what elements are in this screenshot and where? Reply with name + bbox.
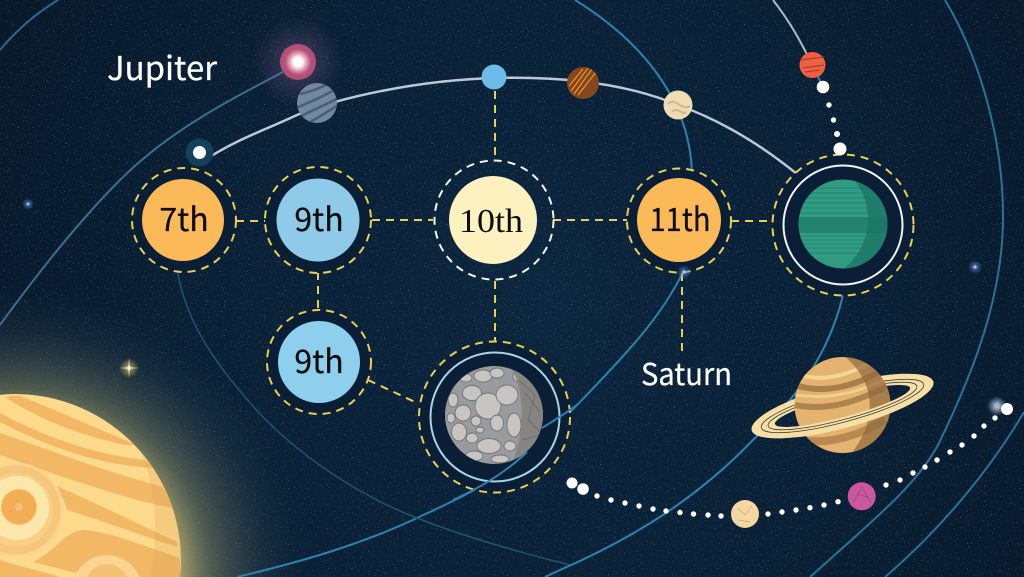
striped blue planet	[297, 83, 337, 123]
small cream planet	[731, 500, 759, 528]
node: 11th: 11th	[650, 195, 710, 241]
label: Jupiter: Jupiter	[107, 42, 217, 90]
ringed planet	[746, 355, 939, 455]
node: 7th	[132, 168, 236, 272]
dashed connectors	[236, 91, 773, 402]
pink glowing star	[253, 17, 343, 107]
node: 10th	[434, 160, 554, 280]
light blue planet	[482, 64, 506, 90]
node: 11th	[627, 168, 731, 272]
cream planet	[664, 90, 692, 120]
node: green planet	[772, 154, 914, 296]
node: rocky planet	[419, 342, 578, 500]
node: 9th upper	[265, 167, 371, 273]
sun glow	[0, 285, 315, 577]
red planet	[800, 52, 826, 78]
dotted trail: top	[817, 81, 846, 156]
node: 10th: 10th	[459, 203, 523, 240]
sun	[0, 394, 190, 577]
node: 9th upper: 9th	[294, 195, 344, 241]
distant blue sparkles	[22, 198, 982, 279]
white node at orbit start	[186, 138, 214, 166]
main silver orbit	[205, 78, 797, 174]
pink planet	[848, 482, 876, 510]
node: 9th lower	[267, 310, 371, 414]
blue orbit segment over the ring	[453, 404, 578, 500]
dotted trail: bottom	[566, 396, 1013, 519]
small glowing star near sun	[119, 358, 139, 378]
node: 7th: 7th	[159, 195, 209, 241]
brown planet	[567, 67, 599, 99]
node: 9th lower: 9th	[294, 337, 344, 383]
label: Saturn: Saturn	[641, 350, 732, 394]
